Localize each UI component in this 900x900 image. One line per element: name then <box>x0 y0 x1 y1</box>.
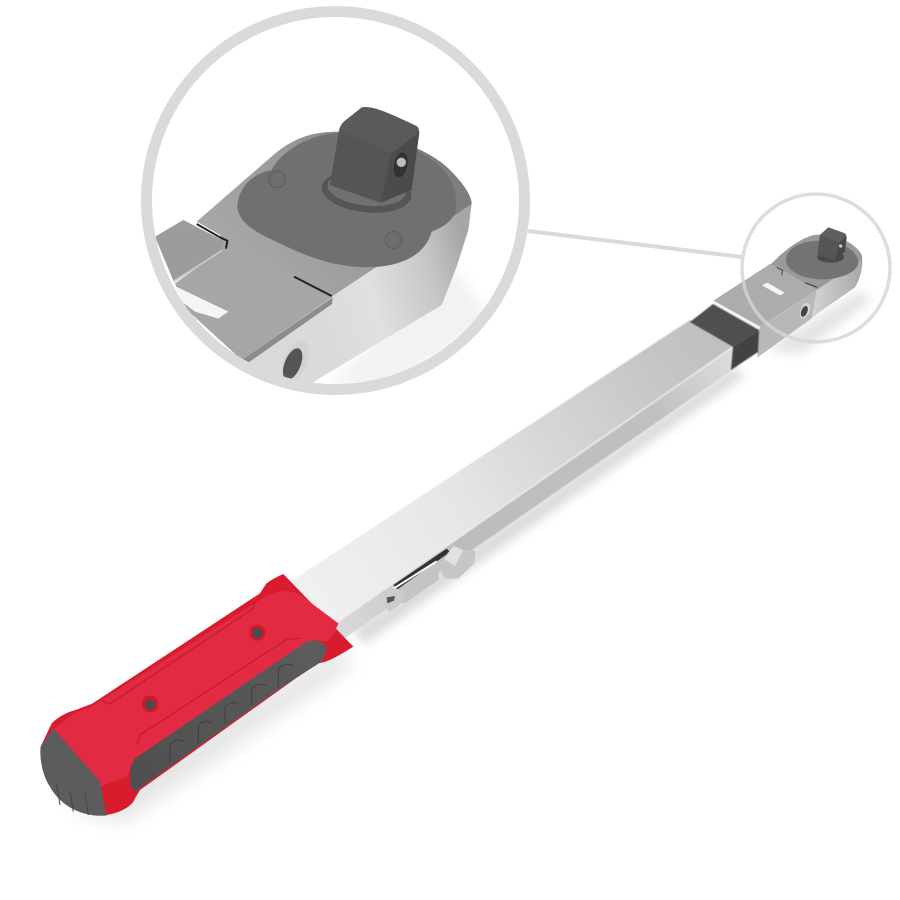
grey end cap <box>40 728 107 816</box>
drive collar <box>322 176 412 213</box>
latch highlight <box>389 561 437 591</box>
head body <box>757 235 862 357</box>
latch bar <box>388 560 439 603</box>
handle groove upper <box>102 602 255 704</box>
white slot <box>175 286 228 319</box>
screw lower <box>142 696 158 712</box>
handle top face <box>53 591 338 787</box>
handle with red overmould and grey grip <box>40 574 353 816</box>
handle groove lower <box>137 638 300 745</box>
square drive <box>330 107 419 203</box>
sleeve plate <box>713 264 817 357</box>
lower plate <box>175 233 333 360</box>
latch clip end <box>384 587 405 612</box>
latch slot <box>393 549 450 589</box>
screw hole <box>283 348 302 378</box>
ratchet head on main wrench <box>713 227 862 357</box>
recess marks <box>269 171 402 248</box>
head shadow on ground <box>344 274 482 383</box>
dark disc <box>237 133 456 267</box>
leader line <box>528 231 742 257</box>
latch knob <box>439 546 475 579</box>
head disc <box>786 241 858 279</box>
shadow beneath wrench <box>70 290 872 822</box>
lens contents <box>155 107 493 390</box>
square drive <box>817 227 847 263</box>
magnified detail circle <box>146 12 524 390</box>
screw upper <box>249 625 265 641</box>
head side wall <box>242 203 472 390</box>
head top face <box>197 132 472 297</box>
red handle body <box>40 574 353 816</box>
black slot marks <box>197 224 332 296</box>
side screw hole <box>798 301 812 320</box>
left slab <box>155 220 223 282</box>
grey grip insert <box>130 640 327 792</box>
sliding latch on beam side <box>384 546 475 612</box>
beam of the wrench <box>270 320 740 640</box>
black collar band <box>690 304 759 370</box>
lens ring <box>146 12 524 390</box>
plate front edge <box>242 297 333 363</box>
small magnifier ring <box>742 194 890 342</box>
